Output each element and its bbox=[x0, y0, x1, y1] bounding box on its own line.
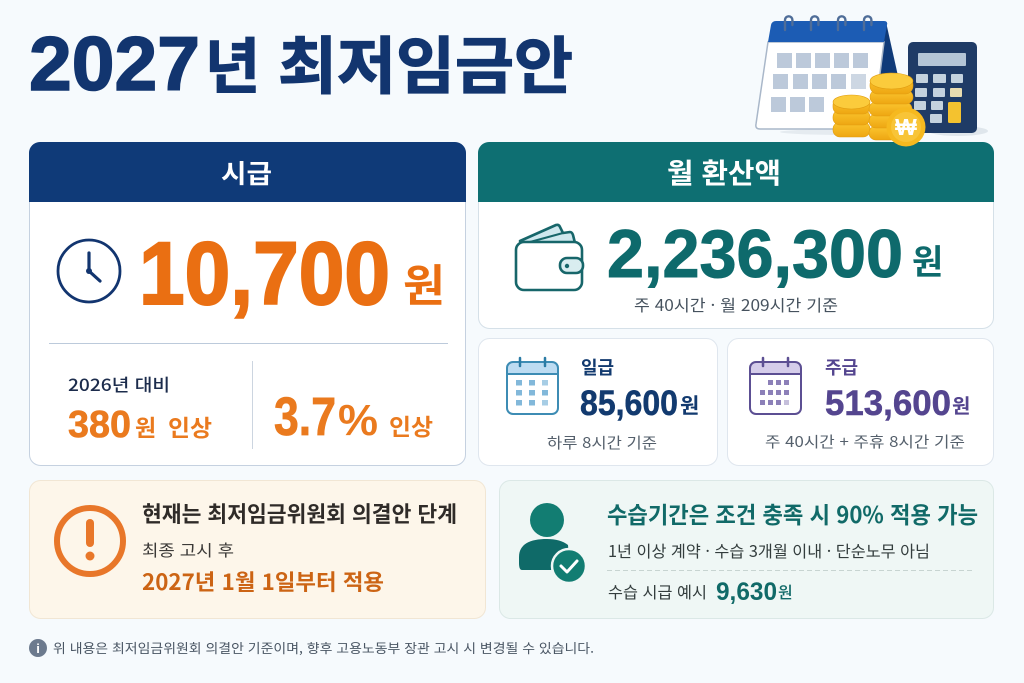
monthly amount: 원 bbox=[912, 235, 943, 284]
notice body bbox=[142, 537, 384, 597]
title: 년 bbox=[205, 19, 260, 106]
title: 2027 bbox=[29, 22, 200, 107]
title: 최저임금안 bbox=[278, 16, 573, 106]
increase in won bbox=[68, 371, 212, 446]
icon: exclamation bbox=[57, 508, 123, 574]
heading: monthly equivalent: 월 환산액 bbox=[667, 152, 781, 192]
increase in percent: 3.7 bbox=[274, 387, 336, 447]
notice body: 최종 고시 후 bbox=[142, 537, 234, 561]
probation example bbox=[608, 578, 793, 606]
icon: blue calendar bbox=[507, 358, 558, 414]
daily wage label and amount: 85,600 bbox=[580, 384, 678, 423]
panel: daily wage bbox=[478, 338, 718, 466]
daily wage label and amount bbox=[580, 354, 699, 423]
increase in won: 원 bbox=[135, 409, 156, 443]
probation example: 수습 시급 예시 bbox=[608, 579, 707, 603]
heading: hourly wage: 시급 bbox=[221, 154, 272, 191]
hourly wage amount: 원 bbox=[403, 250, 445, 314]
icon: purple calendar bbox=[750, 358, 801, 414]
panel: weekly wage bbox=[728, 338, 994, 466]
icon: won coin bbox=[886, 108, 926, 146]
calculator bbox=[908, 42, 977, 133]
weekly wage label and amount: 513,600 bbox=[825, 384, 951, 423]
coins bbox=[833, 73, 913, 140]
icon: clock bbox=[58, 240, 120, 302]
monthly basis note: 주 40시간 · 월 209시간 기준 bbox=[634, 292, 838, 316]
increase in percent bbox=[274, 387, 433, 447]
footnote: i bbox=[36, 641, 40, 656]
hourly wage amount: 10,700 bbox=[139, 223, 390, 323]
heading: hourly wage bbox=[29, 142, 466, 202]
icon: person with check bbox=[519, 503, 586, 583]
notice body: 2027년 1월 1일부터 적용 bbox=[142, 565, 384, 597]
daily wage label and amount: 일급 bbox=[581, 354, 614, 380]
calendar bbox=[756, 16, 898, 129]
panel: probation bbox=[500, 480, 994, 618]
heading: monthly equivalent bbox=[478, 142, 994, 202]
probation heading: 수습기간은 조건 충족 시 90% 적용 가능 bbox=[607, 496, 978, 530]
probation example: 9,630 bbox=[716, 578, 777, 606]
illustration: calendar, calculator and coins bbox=[756, 16, 988, 146]
icon: wallet bbox=[516, 225, 583, 290]
footnote: 위 내용은 최저임금위원회 의결안 기준이며, 향후 고용노동부 장관 고시 시 변경될 수 있습니다. bbox=[53, 638, 594, 657]
icon: won coin: ₩ bbox=[895, 114, 917, 140]
panel: monthly equivalent bbox=[478, 142, 994, 328]
increase in percent: % bbox=[338, 396, 378, 445]
weekly wage label and amount: 주급 bbox=[825, 354, 858, 380]
weekly wage label and amount: 원 bbox=[952, 390, 970, 419]
probation example: 원 bbox=[778, 579, 793, 603]
daily basis note: 하루 8시간 기준 bbox=[547, 432, 657, 453]
increase in won: 380 bbox=[68, 404, 131, 446]
panel: status notice bbox=[30, 480, 486, 618]
increase in percent: 인상 bbox=[389, 408, 433, 442]
notice heading: 현재는 최저임금위원회 의결안 단계 bbox=[142, 497, 457, 529]
weekly wage label and amount bbox=[825, 354, 970, 423]
probation conditions: 1년 이상 계약 · 수습 3개월 이내 · 단순노무 아님 bbox=[608, 538, 930, 562]
panel: hourly wage bbox=[29, 142, 466, 466]
title bbox=[29, 16, 573, 107]
weekly basis note: 주 40시간 + 주휴 8시간 기준 bbox=[765, 431, 965, 452]
increase in won: 인상 bbox=[168, 409, 212, 443]
daily wage label and amount: 원 bbox=[680, 390, 699, 420]
increase in won: 2026년 대비 bbox=[68, 371, 170, 396]
monthly amount: 2,236,300 bbox=[607, 216, 903, 292]
